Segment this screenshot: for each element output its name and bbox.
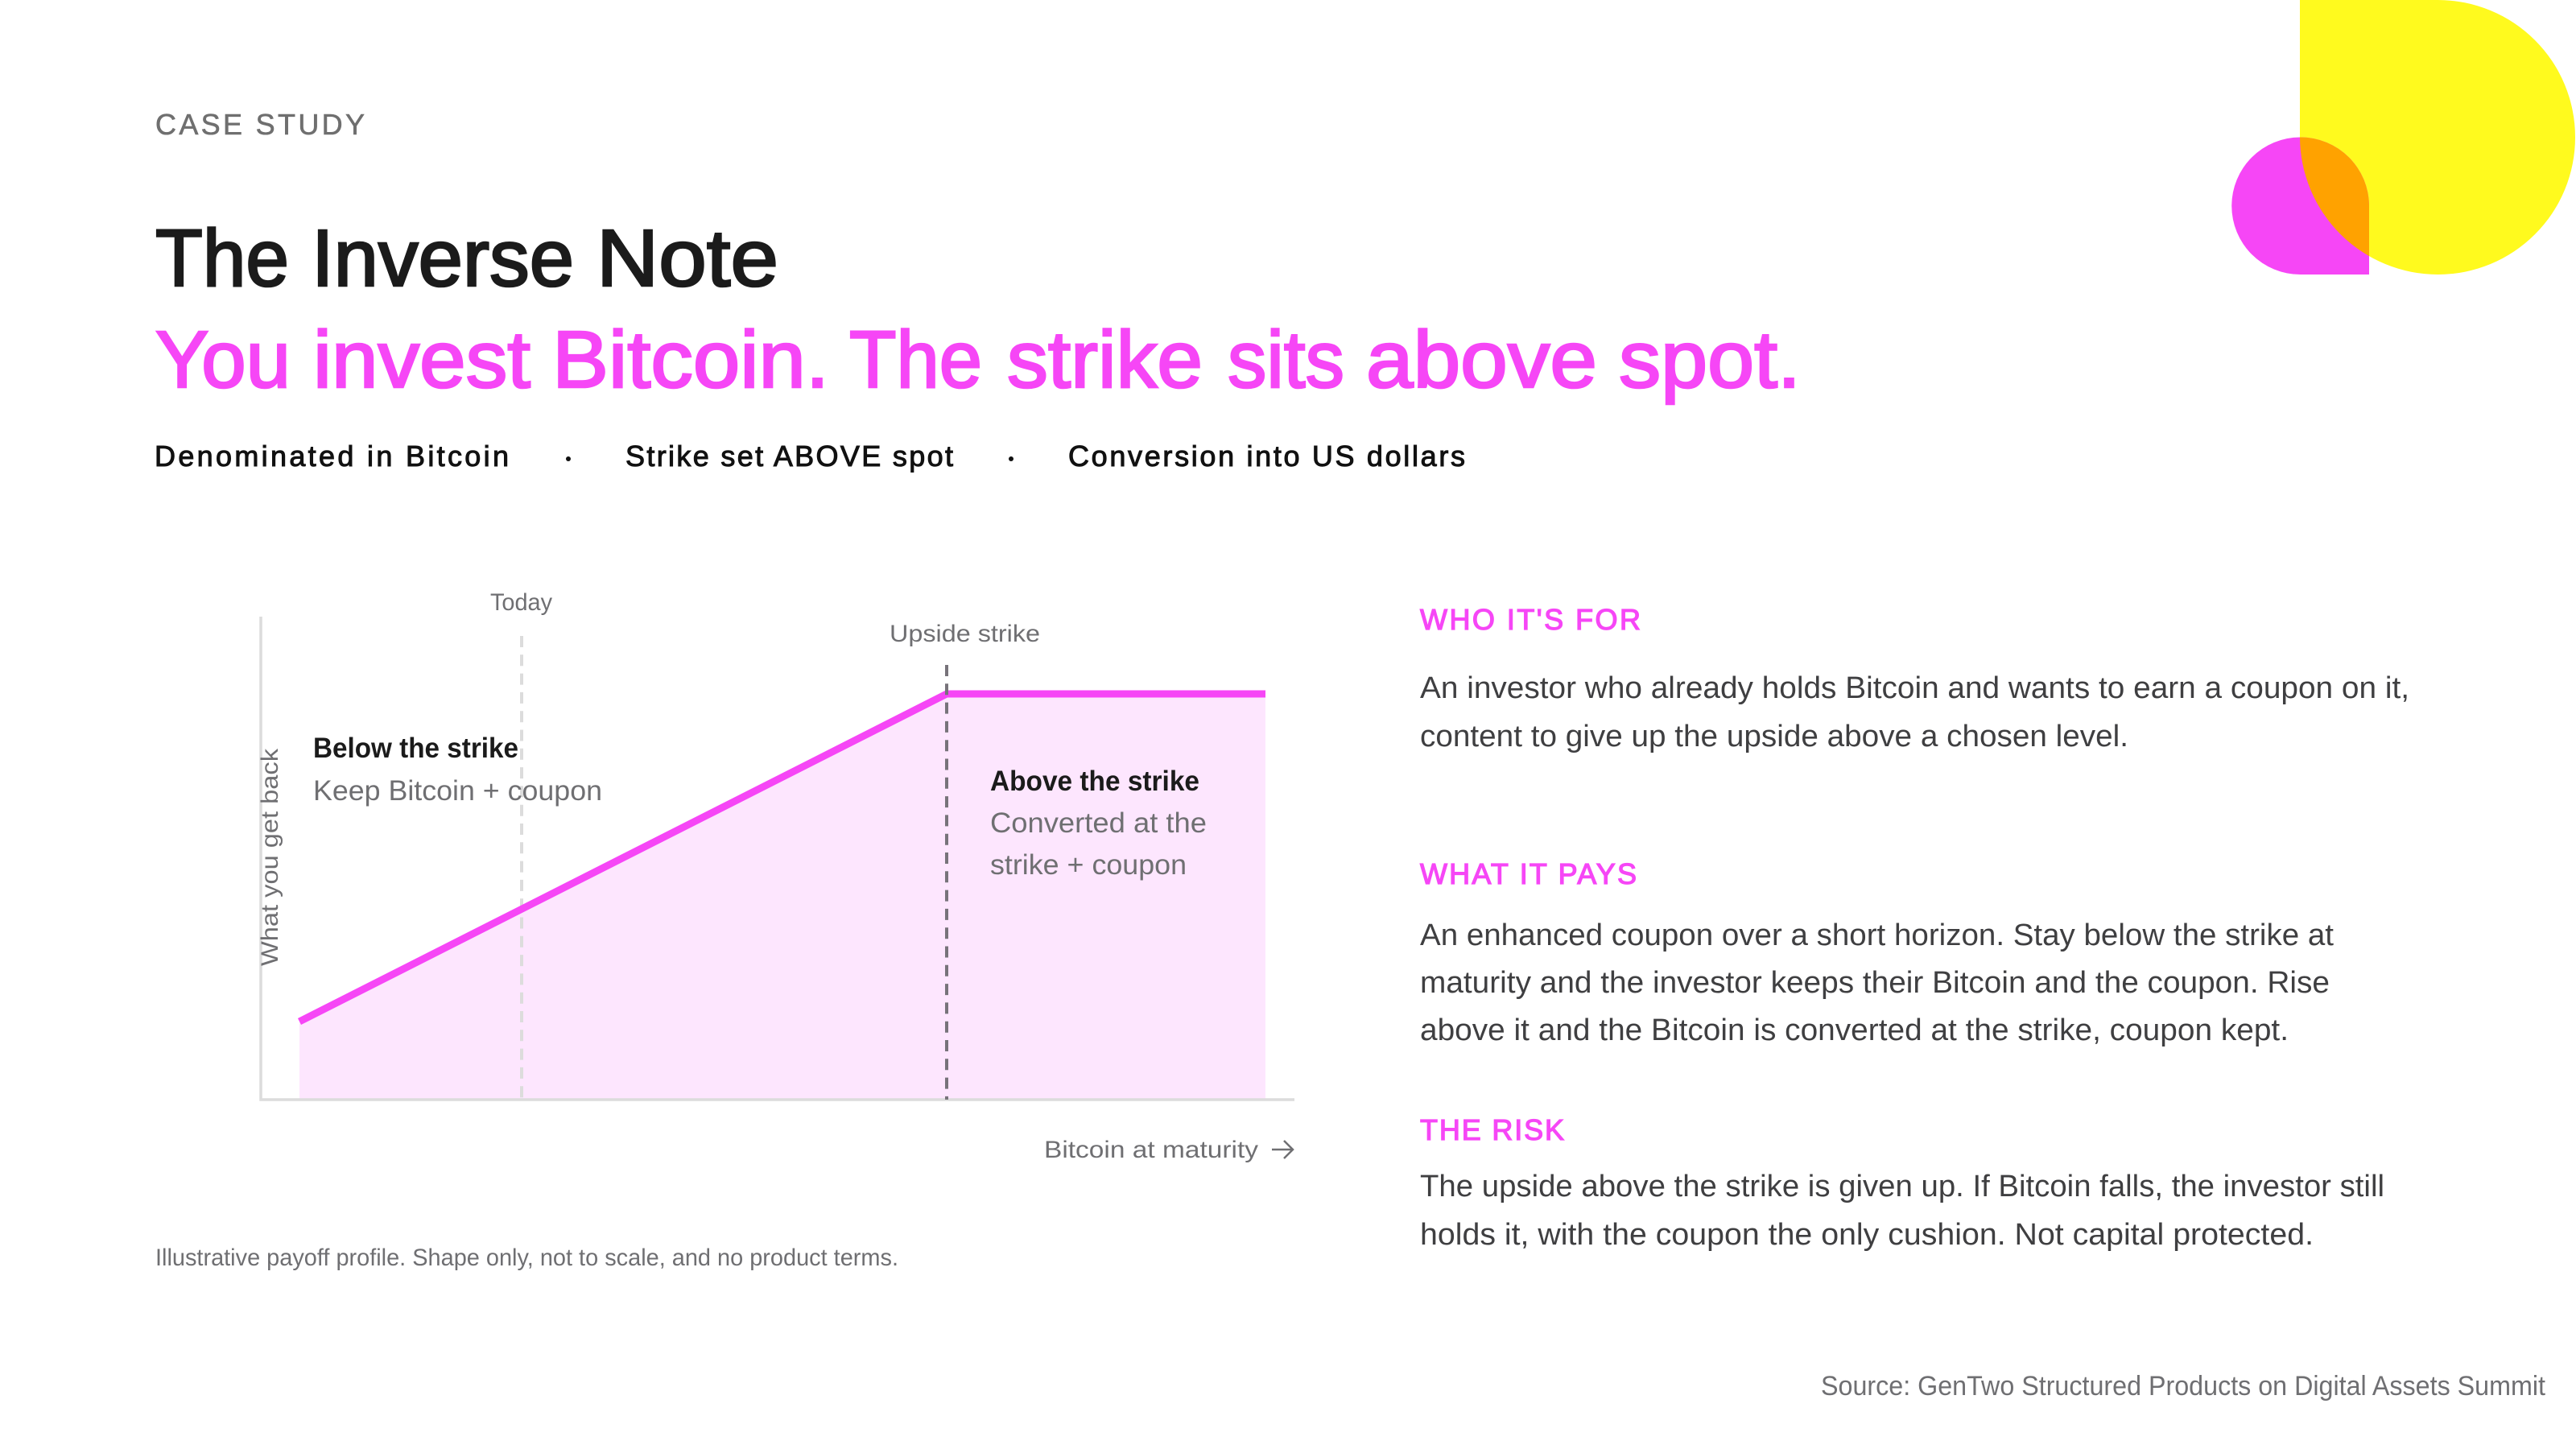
- footnote: Illustrative payoff profile. Shape only, not to scale, and no product terms.: [155, 1245, 898, 1271]
- annotation: below the strike: Keep Bitcoin + coupon: [313, 775, 602, 807]
- subtitle: You: [155, 315, 291, 405]
- annotation: above the strike: [990, 766, 1207, 881]
- body text: maturity and the investor keeps their Bitcoin and the coupon. Rise: [1420, 966, 2330, 1000]
- yellow shape: [2300, 0, 2575, 275]
- decorative logo shapes: [2231, 0, 2575, 275]
- separator dot: [1009, 456, 1013, 461]
- today marker line: [520, 636, 523, 1100]
- body text: The upside above the strike is given up. If Bitcoin falls, the investor still: [1420, 1170, 2384, 1203]
- annotation: above the strike: strike + coupon: [990, 849, 1187, 881]
- icon: arrow: [1272, 1141, 1293, 1158]
- label: today: Today: [490, 589, 552, 616]
- annotation: above the strike: Above the strike: [990, 766, 1199, 797]
- heading: THE RISK: [1420, 1113, 1564, 1146]
- orange overlap: [2300, 137, 2369, 256]
- tag: strike: Strike set ABOVE spot: [625, 440, 953, 473]
- subtitle: above: [1366, 315, 1597, 405]
- subtitle: [155, 315, 1801, 405]
- body text: An enhanced coupon over a short horizon. Stay below the strike at: [1420, 919, 2334, 952]
- body text: [1420, 671, 2409, 753]
- body text: above it and the Bitcoin is converted at the strike, coupon kept.: [1420, 1013, 2289, 1047]
- body text: An investor who already holds Bitcoin and wants to earn a coupon on it,: [1420, 671, 2409, 705]
- subtitle: The: [849, 315, 982, 405]
- heading: WHO IT'S FOR: [1420, 603, 1641, 636]
- axes: [261, 617, 1294, 1100]
- annotation: above the strike: Converted at the: [990, 807, 1207, 839]
- annotation: below the strike: [313, 733, 602, 807]
- body text: content to give up the upside above a chosen level.: [1420, 720, 2128, 753]
- section: the risk: [1420, 1113, 2384, 1252]
- payoff chart: [257, 589, 1294, 1163]
- separator dot: [566, 456, 571, 461]
- x axis label: Bitcoin at maturity: [1044, 1137, 1258, 1163]
- section: what it pays: [1420, 857, 2334, 1047]
- body text: [1420, 1170, 2384, 1252]
- subtitle: strike: [1007, 315, 1203, 405]
- feature tags row: [155, 440, 1465, 473]
- body text: holds it, with the coupon the only cushion. Not capital protected.: [1420, 1218, 2314, 1252]
- magenta shape: [2231, 137, 2369, 275]
- eyebrow: case study: CASE STUDY: [155, 108, 365, 141]
- body text: [1420, 919, 2334, 1047]
- area fill under payoff: [299, 694, 1265, 1100]
- tag: conversion: Conversion into US dollars: [1068, 440, 1465, 473]
- y axis label: What you get back: [257, 748, 283, 966]
- payoff line: [299, 694, 1265, 1022]
- subtitle: invest: [313, 315, 530, 405]
- title: Note: [597, 213, 778, 303]
- subtitle: Bitcoin.: [552, 315, 829, 405]
- subtitle: spot.: [1619, 315, 1801, 405]
- source line: Source: GenTwo Structured Products on Digital Assets Summit: [1821, 1371, 2546, 1402]
- title: [155, 213, 778, 303]
- label: upside strike: Upside strike: [890, 621, 1040, 647]
- heading: WHAT IT PAYS: [1420, 857, 1637, 890]
- annotation: below the strike: Below the strike: [313, 733, 518, 764]
- title: The: [155, 213, 289, 303]
- upside strike marker line: [945, 665, 948, 1100]
- subtitle: sits: [1228, 315, 1344, 405]
- title: Inverse: [312, 213, 574, 303]
- tag: denominated: Denominated in Bitcoin: [155, 440, 509, 473]
- section: who it's for: [1420, 603, 2409, 753]
